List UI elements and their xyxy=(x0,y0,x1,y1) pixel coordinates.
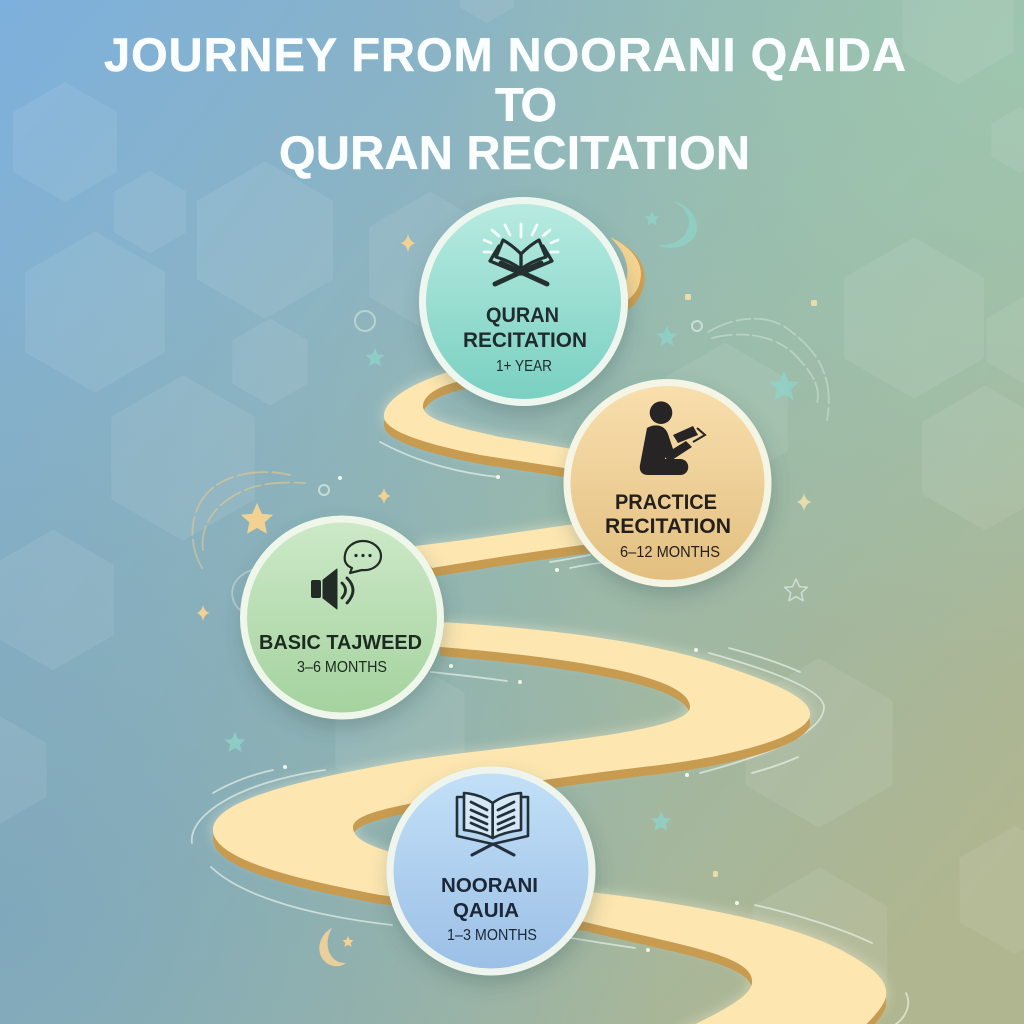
circle: Noorani Qaida xyxy=(390,770,592,972)
label: Practice Recitation: PRACTICE xyxy=(615,491,717,514)
icon: open book with lines xyxy=(457,793,528,855)
label: Practice Recitation xyxy=(605,491,731,561)
title: QURAN RECITATION xyxy=(279,126,750,179)
label: Basic Tajweed: BASIC TAJWEED xyxy=(259,631,422,654)
gold dashed swirls xyxy=(192,472,305,568)
road glow xyxy=(213,366,886,1024)
circle: Practice Recitation xyxy=(567,382,768,584)
label: Basic Tajweed: 3–6 MONTHS xyxy=(297,659,387,676)
title: TO xyxy=(495,78,557,131)
label: Noorani Qauia xyxy=(441,874,538,944)
label: Noorani Qauia: QAUIA xyxy=(453,899,519,922)
circle: Basic Tajweed xyxy=(244,519,440,716)
label: Quran Recitation: RECITATION xyxy=(463,329,587,352)
title xyxy=(104,28,906,179)
label: Quran Recitation: 1+ YEAR xyxy=(496,358,552,375)
label: Quran Recitation: QURAN xyxy=(486,304,559,327)
label: Noorani Qauia: NOORANI xyxy=(441,874,538,897)
icon: speaker with speech bubble xyxy=(311,541,381,609)
label: Practice Recitation: 6–12 MONTHS xyxy=(620,544,720,561)
icon: open Quran on stand xyxy=(484,224,558,284)
road arc behind Quran circle xyxy=(610,237,645,310)
winding road xyxy=(213,366,886,1024)
label: Practice Recitation: RECITATION xyxy=(605,515,731,538)
decorative stars, moons and sparkles xyxy=(197,201,817,966)
circle: Quran Recitation xyxy=(422,200,624,402)
icon: person reading xyxy=(640,401,705,475)
label: Quran Recitation xyxy=(463,304,587,375)
label: Basic Tajweed xyxy=(259,631,422,676)
title: JOURNEY FROM NOORANI QAIDA xyxy=(104,28,906,81)
label: Noorani Qauia: 1–3 MONTHS xyxy=(447,927,537,944)
decorative swirl lines xyxy=(192,319,908,1024)
